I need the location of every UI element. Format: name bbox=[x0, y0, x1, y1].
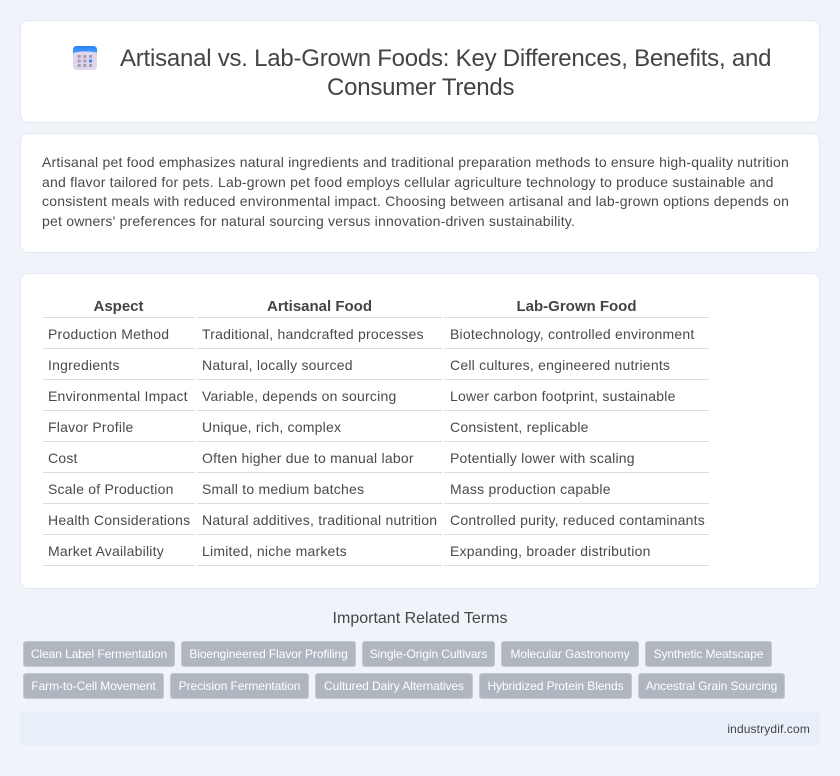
table rows: Mass production capable bbox=[450, 481, 611, 497]
table rows: Small to medium batches bbox=[202, 481, 364, 497]
table rows: Lower carbon footprint, sustainable bbox=[450, 388, 676, 404]
related terms tags: Single-Origin Cultivars bbox=[370, 647, 487, 661]
intro text: and flavor tailored for pets. Lab-grown pet food employs cellular agriculture technology to produce sustainable and bbox=[42, 174, 774, 190]
table rows: Traditional, handcrafted processes bbox=[202, 326, 424, 342]
table rows: Limited, niche markets bbox=[202, 543, 347, 559]
table header: artisanal food: Artisanal Food bbox=[267, 298, 372, 315]
related terms tags: Ancestral Grain Sourcing bbox=[646, 679, 777, 693]
table rows: Potentially lower with scaling bbox=[450, 450, 635, 466]
table rows: Cell cultures, engineered nutrients bbox=[450, 357, 670, 373]
intro text: consistent meals with reduced environmental impact. Choosing between artisanal and lab-grown options depends on bbox=[42, 193, 789, 209]
table rows: Environmental Impact bbox=[48, 388, 188, 404]
table rows: Flavor Profile bbox=[48, 419, 134, 435]
related terms tags: Synthetic Meatscape bbox=[654, 647, 763, 661]
table rows: Market Availability bbox=[48, 543, 164, 559]
footer bar bbox=[20, 712, 820, 746]
related terms tags: Cultured Dairy Alternatives bbox=[324, 679, 464, 693]
intro text: Artisanal pet food emphasizes natural ingredients and traditional preparation methods to ensure high-quality nutrition bbox=[42, 154, 789, 170]
related terms tags: Bioengineered Flavor Profiling bbox=[189, 647, 348, 661]
related terms tags: Clean Label Fermentation bbox=[31, 647, 167, 661]
table header: lab-grown food: Lab-Grown Food bbox=[516, 298, 636, 315]
table rows: Unique, rich, complex bbox=[202, 419, 341, 435]
table rows: Consistent, replicable bbox=[450, 419, 589, 435]
table rows: Often higher due to manual labor bbox=[202, 450, 414, 466]
intro text: pet owners' preferences for natural sourcing versus innovation-driven sustainability. bbox=[42, 213, 575, 229]
related terms tags: Precision Fermentation bbox=[179, 679, 300, 693]
title: Consumer Trends bbox=[327, 74, 514, 101]
icon: calendar bbox=[73, 46, 97, 70]
table rows: Ingredients bbox=[48, 357, 120, 373]
related terms tags: Hybridized Protein Blends bbox=[487, 679, 624, 693]
related terms tags: Molecular Gastronomy bbox=[510, 647, 630, 661]
panel: intro bbox=[20, 133, 820, 253]
intro text bbox=[42, 154, 789, 229]
table rows bbox=[43, 317, 709, 566]
related terms tags bbox=[23, 641, 785, 699]
heading: important related terms: Important Related Terms bbox=[333, 610, 507, 627]
table rows: Natural, locally sourced bbox=[202, 357, 353, 373]
panel: comparison table bbox=[20, 273, 820, 589]
table rows: Health Considerations bbox=[48, 512, 190, 528]
related terms tags: Farm-to-Cell Movement bbox=[31, 679, 156, 693]
table rows: Natural additives, traditional nutrition bbox=[202, 512, 437, 528]
table rows: Production Method bbox=[48, 326, 169, 342]
table rows: Controlled purity, reduced contaminants bbox=[450, 512, 705, 528]
table rows: Biotechnology, controlled environment bbox=[450, 326, 694, 342]
table header: aspect: Aspect bbox=[93, 298, 144, 315]
table rows: Expanding, broader distribution bbox=[450, 543, 651, 559]
table rows: Cost bbox=[48, 450, 78, 466]
header panel bbox=[20, 20, 820, 123]
table rows: Scale of Production bbox=[48, 481, 174, 497]
title: Artisanal vs. Lab-Grown Foods: Key Differences, Benefits, and bbox=[120, 45, 771, 72]
title bbox=[120, 45, 771, 101]
table rows: Variable, depends on sourcing bbox=[202, 388, 396, 404]
footer source: industrydif.com bbox=[727, 722, 810, 736]
